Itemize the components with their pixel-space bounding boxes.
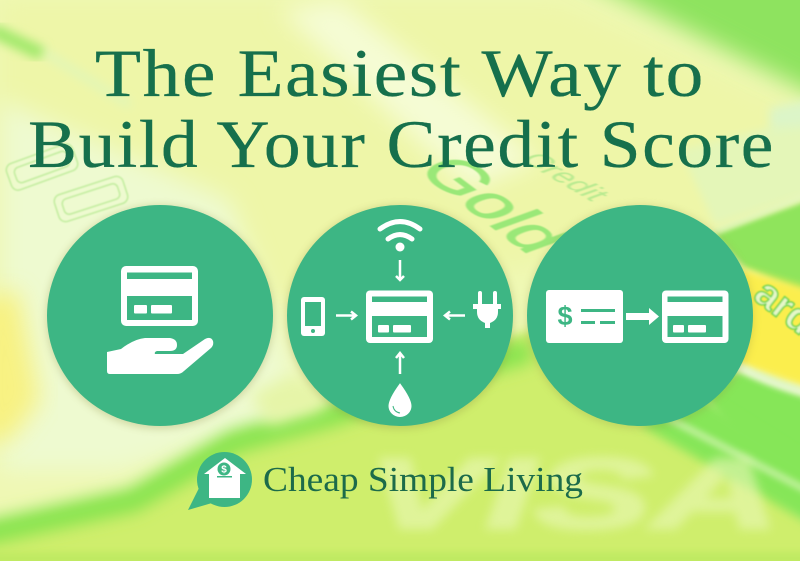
icon: speech bubble with house: $: [221, 464, 227, 476]
panel: receiving a card: [46, 205, 274, 429]
icon: credit card: [662, 290, 728, 343]
arrow: plug to card: [445, 312, 465, 320]
panel: bills reported to card: [286, 205, 514, 429]
title: [28, 35, 775, 182]
panel: cheque to card: [526, 205, 754, 429]
icon: speech bubble with house: [188, 452, 252, 510]
card lettering: VISA: VISA: [367, 438, 780, 550]
icon: credit card: [366, 290, 433, 343]
title line 1: The Easiest Way to: [95, 35, 705, 111]
arrow: wifi to card: [396, 260, 404, 280]
arrow: phone to card: [336, 312, 356, 320]
icon: credit card: [121, 266, 198, 326]
icon: phone: [301, 297, 325, 336]
card chip outlines: [4, 142, 130, 223]
title line 2: Build Your Credit Score: [28, 106, 775, 182]
icon: cheque: [546, 290, 623, 343]
card lettering: Gold: Gold: [401, 148, 587, 260]
icon: cheque: $: [557, 301, 573, 331]
icon: open hand: [107, 338, 213, 374]
logo wordmark: Cheap Simple Living: [263, 460, 583, 499]
logo: Cheap Simple Living: [188, 452, 583, 510]
icon: water drop: [389, 384, 411, 416]
icon: wifi: [380, 222, 420, 252]
arrow: cheque to card: [626, 308, 659, 325]
arrow: water to card: [396, 353, 404, 374]
icon: plug: [473, 291, 501, 328]
card lettering: Credit: Credit: [512, 149, 619, 204]
